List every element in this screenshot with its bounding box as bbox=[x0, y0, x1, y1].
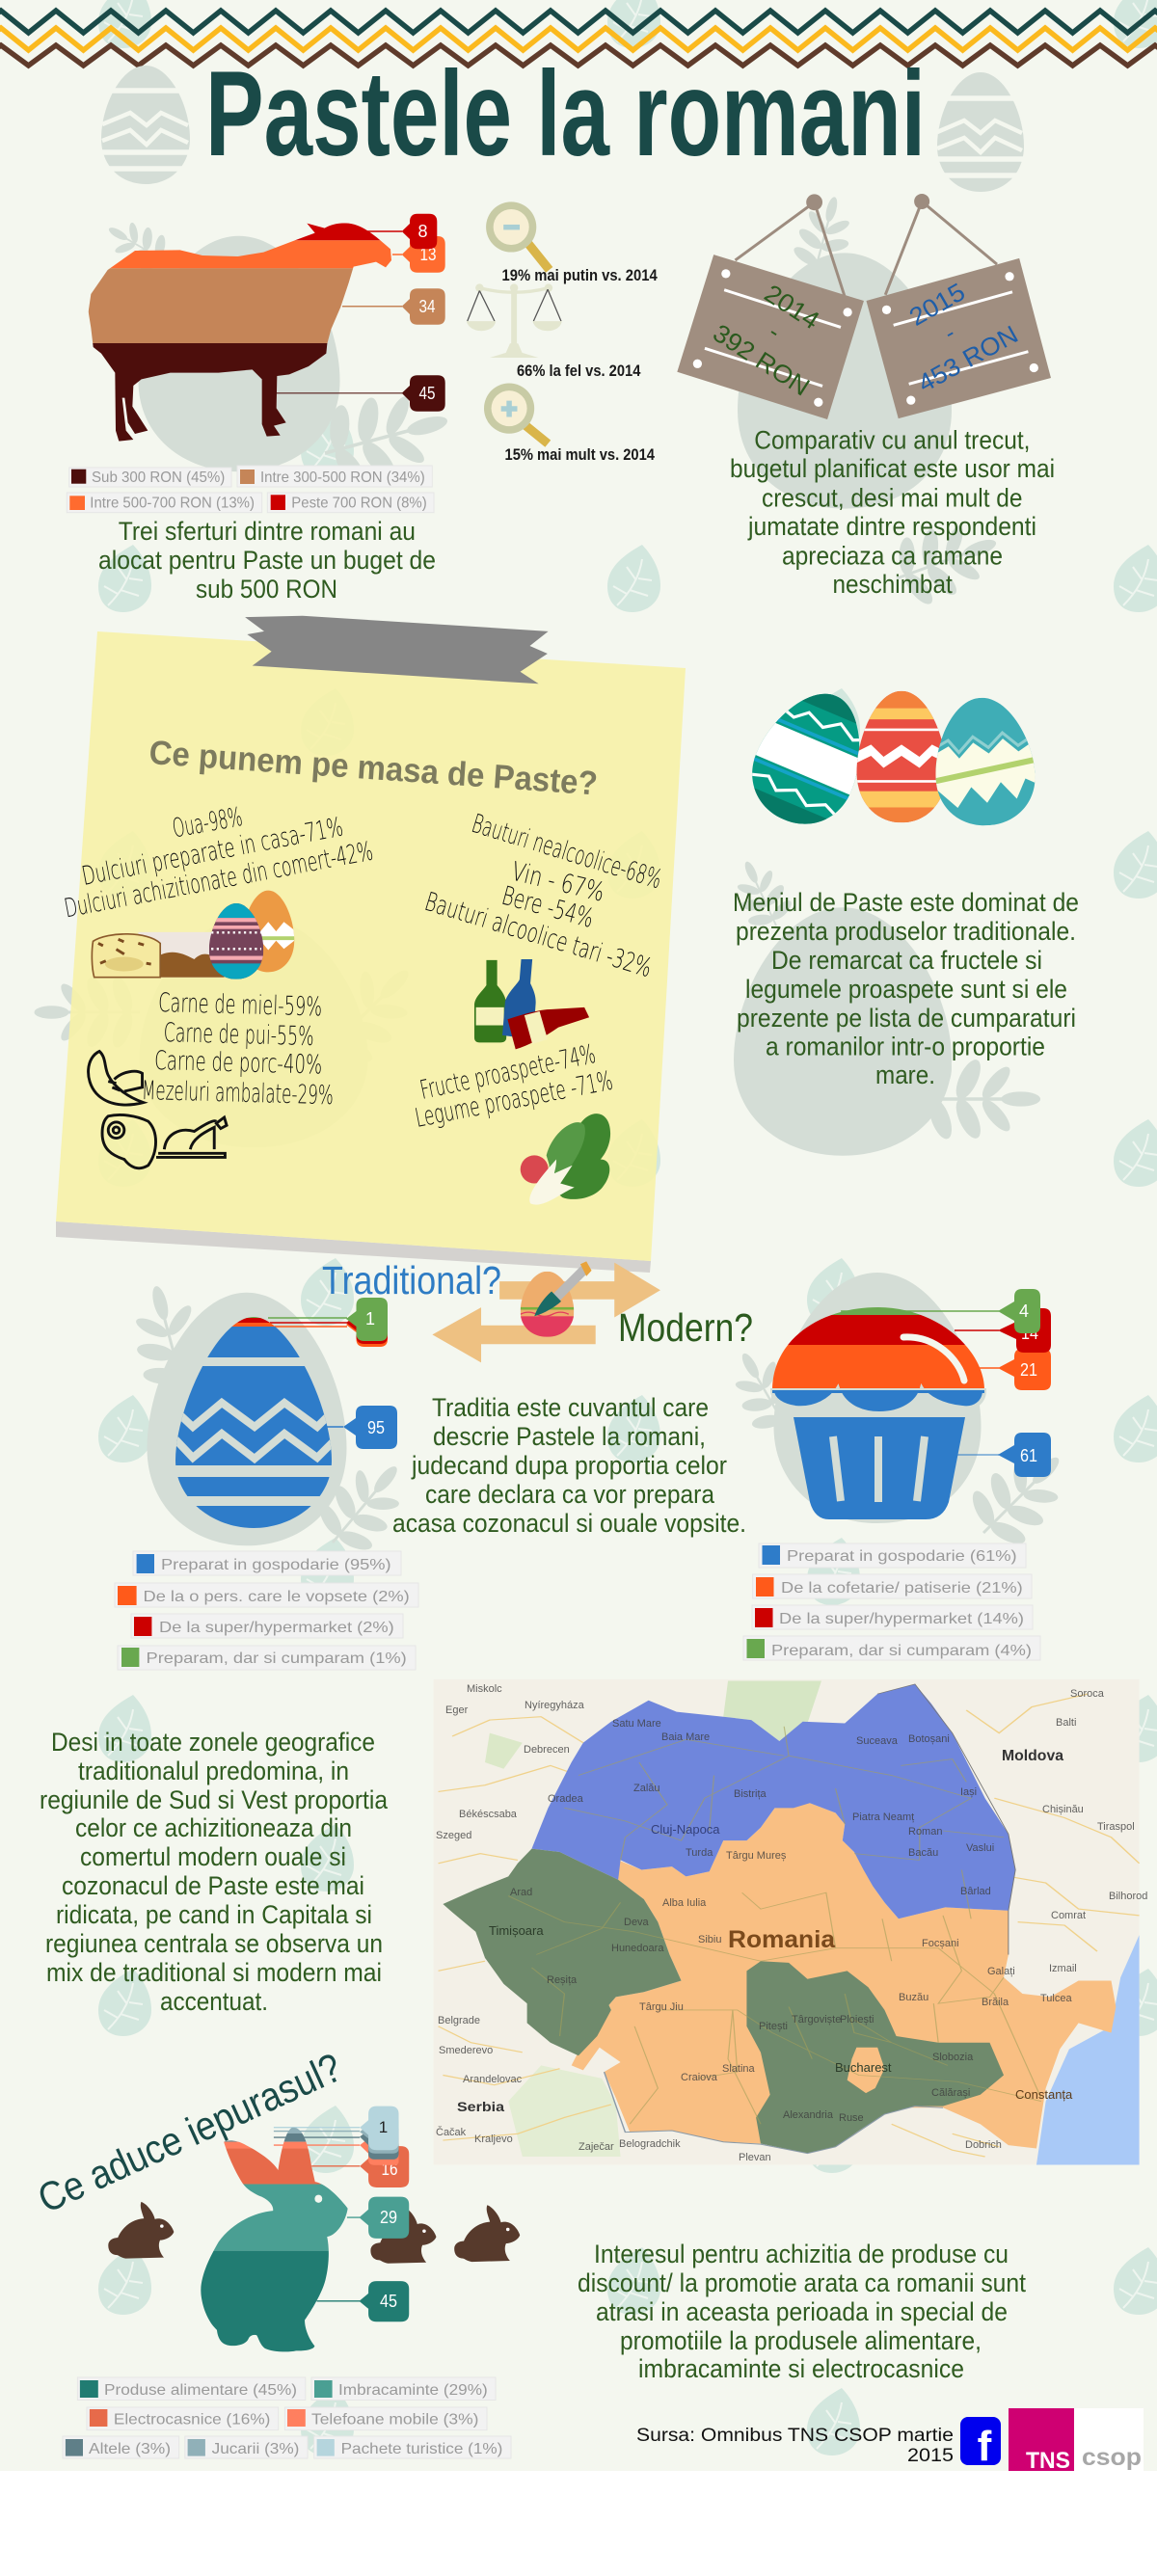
map labels: Cluj-Napoca bbox=[651, 1822, 720, 1837]
drinks list: Vin - 67% bbox=[508, 857, 607, 908]
map labels: Timișoara bbox=[489, 1923, 544, 1938]
map labels: Zalău bbox=[633, 1783, 660, 1794]
text: menu summary: prezenta produselor traditionale. bbox=[736, 917, 1076, 946]
text: discount summary: atrasi in aceasta perioada in special de bbox=[596, 2297, 1008, 2326]
map labels: Deva bbox=[624, 1917, 650, 1928]
meat list: Carne de miel-59% bbox=[158, 988, 323, 1022]
sweets and eggs list: Oua-98% bbox=[171, 802, 245, 844]
text: budget comparison: crescut, desi mai mult de bbox=[762, 483, 1022, 512]
text: regional summary: regiunea centrala se observa un bbox=[45, 1929, 383, 1958]
value 4: 4 bbox=[1019, 1301, 1029, 1321]
callout 16 bbox=[360, 2146, 409, 2187]
map labels: Roman bbox=[908, 1826, 942, 1838]
map labels: Plevan bbox=[739, 2152, 771, 2163]
text: menu summary: mare. bbox=[875, 1060, 935, 1089]
decorative title egg right bbox=[930, 72, 1027, 192]
text: budget summary: alocat pentru Paste un buget de bbox=[98, 546, 436, 575]
leader lines bbox=[363, 230, 402, 232]
map labels: Ploiești bbox=[840, 2014, 874, 2026]
panel: traditional egg chart bbox=[174, 1298, 397, 1529]
traditional legend: De la super/hypermarket (2%) bbox=[159, 1620, 394, 1636]
text: regional summary: mix de traditional si modern mai bbox=[46, 1958, 382, 1987]
value 16: 16 bbox=[382, 2160, 397, 2179]
text: tradition summary: care declara ca vor prepara bbox=[425, 1480, 715, 1509]
callout 21 bbox=[998, 1349, 1051, 1390]
map labels: Bacău bbox=[908, 1847, 938, 1859]
text: discount summary: discount/ la promotie arata ca romanii sunt bbox=[578, 2268, 1026, 2297]
heading: Ce aduce iepurasul: Ce aduce iepurasul? bbox=[31, 2044, 348, 2221]
map labels: Soroca bbox=[1070, 1688, 1105, 1700]
value 45: 45 bbox=[418, 384, 436, 403]
map labels: Belgrade bbox=[438, 2015, 480, 2026]
sign 2015 bbox=[866, 258, 1051, 418]
sheep legend bbox=[67, 466, 434, 513]
callout 61 bbox=[998, 1433, 1051, 1477]
callout stack to 1 bbox=[360, 2106, 399, 2165]
rabbit legend: Altele (3%) bbox=[89, 2441, 171, 2457]
map labels: Comrat bbox=[1051, 1910, 1086, 1921]
text: discount summary bbox=[578, 2240, 1026, 2383]
source note: Sursa: Omnibus TNS CSOP martie bbox=[636, 2426, 954, 2446]
sweets and eggs list: Dulciuri preparate in casa-71% bbox=[79, 812, 345, 892]
leader lines bbox=[274, 2128, 360, 2301]
sweets and eggs list: Dulciuri achizitionate din comert-42% bbox=[62, 837, 375, 924]
map labels: Izmail bbox=[1049, 1963, 1077, 1974]
text: regional summary: regiunile de Sud si Vest proportia bbox=[40, 1785, 389, 1814]
text: menu summary: a romanilor intr-o proportie bbox=[766, 1032, 1045, 1060]
icon: magnifier plus bbox=[484, 384, 545, 441]
tape bbox=[245, 616, 549, 684]
source note bbox=[636, 2426, 954, 2466]
map labels: Iași bbox=[960, 1786, 977, 1798]
value 1: 1 bbox=[379, 2118, 388, 2136]
arrow: to the left bbox=[432, 1307, 596, 1362]
rabbit legend: Electrocasnice (16%) bbox=[114, 2411, 270, 2428]
callout 45 bbox=[359, 2281, 409, 2321]
traditional legend: Preparat in gospodarie (95%) bbox=[161, 1557, 391, 1573]
map labels: Eger bbox=[445, 1704, 469, 1716]
modern legend: Preparam, dar si cumparam (4%) bbox=[771, 1643, 1032, 1659]
roads and borders bbox=[508, 1727, 1041, 2124]
map labels: Tulcea bbox=[1040, 1993, 1072, 2004]
icon: magnifier minus bbox=[486, 201, 547, 266]
map labels: Brăila bbox=[982, 1997, 1009, 2008]
text: menu summary: legumele proaspete sunt si ele bbox=[745, 975, 1067, 1004]
text: tradition summary: judecand dupa proportia celor bbox=[411, 1451, 727, 1480]
value 8: 8 bbox=[417, 222, 428, 241]
map labels: Ruse bbox=[839, 2112, 864, 2124]
muffin cup bbox=[794, 1417, 965, 1519]
text: discount summary: promotiile la produsele alimentare, bbox=[620, 2326, 982, 2355]
leader lines bbox=[268, 1317, 347, 1319]
sign 2015: 453 RON bbox=[913, 319, 1023, 398]
heading: Modern: Modern? bbox=[618, 1305, 753, 1350]
map labels: Turda bbox=[686, 1847, 713, 1859]
map labels: Alba Iulia bbox=[662, 1897, 707, 1909]
map labels: Romania bbox=[728, 1926, 836, 1953]
logo: TNS csop: TNS bbox=[1026, 2448, 1070, 2474]
striped egg bbox=[174, 1317, 337, 1529]
panel: yellow note bbox=[56, 616, 686, 1273]
produce list: Fructe proaspete-74% bbox=[417, 1039, 598, 1106]
map labels bbox=[436, 1683, 1147, 2163]
map labels: Nyíregyháza bbox=[525, 1700, 585, 1711]
text: menu summary: prezente pe lista de cumparaturi bbox=[737, 1004, 1076, 1033]
rabbit legend: Imbracaminte (29%) bbox=[338, 2382, 488, 2399]
meat list bbox=[142, 988, 334, 1111]
map labels: Balti bbox=[1056, 1717, 1076, 1729]
map labels: Reșița bbox=[547, 1974, 578, 1986]
logo: TNS csop bbox=[1009, 2408, 1144, 2474]
map labels: Tiraspol bbox=[1097, 1821, 1135, 1833]
icon: balance scale bbox=[467, 283, 562, 358]
map labels: Bârlad bbox=[960, 1886, 991, 1897]
map labels: Oradea bbox=[548, 1793, 584, 1805]
map labels: Satu Mare bbox=[612, 1718, 661, 1730]
sheep legend: Intre 500-700 RON (13%) bbox=[90, 496, 255, 512]
sheep legend: Peste 700 RON (8%) bbox=[291, 496, 427, 512]
map labels: Târgu Jiu bbox=[639, 2001, 684, 2013]
icon: bottles bbox=[474, 959, 589, 1049]
sign 2015: 2015 bbox=[904, 277, 970, 332]
rabbit legend: Jucarii (3%) bbox=[212, 2441, 299, 2457]
rabbit legend bbox=[63, 2377, 511, 2458]
text: regional summary: traditionalul predomina, in bbox=[78, 1757, 349, 1785]
callout 95 bbox=[343, 1406, 397, 1449]
value 1: 1 bbox=[365, 1309, 375, 1328]
map labels: Zaječar bbox=[578, 2141, 614, 2153]
value 13: 13 bbox=[420, 245, 436, 264]
value 61: 61 bbox=[1020, 1446, 1037, 1465]
meat list: Carne de pui-55% bbox=[163, 1018, 314, 1052]
map labels: Čačak bbox=[436, 2126, 467, 2138]
value 14: 14 bbox=[1021, 1324, 1038, 1343]
text: regional summary: celor ce achizitioneaza din bbox=[75, 1813, 352, 1842]
panel: map of Romania bbox=[434, 1679, 1147, 2164]
map labels: Piatra Neamț bbox=[852, 1811, 914, 1823]
text: less than 2014: 19% mai putin vs. 2014 bbox=[501, 266, 658, 284]
map labels: Slatina bbox=[722, 2063, 756, 2075]
text: discount summary: Interesul pentru achizitia de produse cu bbox=[594, 2240, 1009, 2268]
map labels: Dobrich bbox=[965, 2139, 1002, 2151]
map labels: Chișinău bbox=[1042, 1804, 1084, 1815]
text: regional summary: ridicata, pe cand in Capitala si bbox=[56, 1900, 372, 1929]
rabbit legend: Telefoane mobile (3%) bbox=[311, 2411, 478, 2428]
map labels: Târgoviște bbox=[792, 2014, 841, 2026]
source note: 2015 bbox=[907, 2446, 954, 2466]
panel: hanging signs bbox=[677, 194, 1051, 419]
map labels: Vaslui bbox=[966, 1842, 994, 1854]
icon: sausage and meat bbox=[89, 1051, 227, 1168]
text: regional summary: cozonacul de Paste este mai bbox=[62, 1871, 364, 1900]
callout 13 bbox=[402, 236, 445, 273]
sign 2015: - bbox=[940, 320, 959, 347]
map labels: Pitești bbox=[759, 2021, 788, 2032]
green egg bbox=[752, 694, 860, 824]
callout 4 bbox=[998, 1289, 1040, 1333]
map labels: Târgu Mureș bbox=[726, 1850, 787, 1862]
value 29: 29 bbox=[380, 2208, 397, 2227]
sweets and eggs list bbox=[62, 802, 375, 924]
callout 29 bbox=[359, 2197, 409, 2239]
arrow: to the right bbox=[499, 1263, 660, 1317]
text: tradition summary: acasa cozonacul si ouale vopsite. bbox=[392, 1509, 746, 1538]
logo: TNS csop: csop bbox=[1082, 2444, 1142, 2471]
traditional legend bbox=[115, 1551, 418, 1670]
map labels: Belogradchik bbox=[619, 2138, 681, 2150]
panel: rabbit gift chart bbox=[193, 2106, 409, 2357]
text: regional summary bbox=[40, 1728, 389, 2016]
note heading: Ce punem pe masa de Paste? bbox=[148, 734, 599, 802]
text: regional summary: comertul modern ouale si bbox=[80, 1842, 346, 1871]
sign 2014 bbox=[677, 194, 997, 419]
map labels: Constanța bbox=[1015, 2087, 1073, 2102]
text: same as 2014: 66% la fel vs. 2014 bbox=[517, 362, 641, 380]
text: more than 2014: 15% mai mult vs. 2014 bbox=[505, 445, 655, 464]
map labels: Moldova bbox=[1002, 1748, 1063, 1764]
map labels: Szeged bbox=[436, 1830, 471, 1841]
text: budget summary: Trei sferturi dintre romani au bbox=[119, 517, 416, 546]
map labels: Focșani bbox=[922, 1938, 959, 1949]
icon: facebook: f bbox=[978, 2423, 992, 2470]
muffin dome bbox=[772, 1307, 984, 1388]
text: tradition summary bbox=[392, 1393, 746, 1538]
text: menu summary bbox=[733, 888, 1079, 1089]
text: menu summary: Meniul de Paste este dominat de bbox=[733, 888, 1079, 917]
teal egg bbox=[935, 698, 1036, 825]
map labels: Kraljevo bbox=[474, 2133, 513, 2145]
text: tradition summary: Traditia este cuvantul care bbox=[432, 1393, 709, 1422]
icon: three easter eggs bbox=[752, 690, 1036, 825]
muffin scalloped top bbox=[772, 1388, 984, 1413]
text: budget comparison: apreciaza ca ramane bbox=[782, 542, 1003, 571]
text: budget comparison: neschimbat bbox=[833, 570, 953, 599]
map labels: Bistrița bbox=[734, 1788, 767, 1800]
value 34: 34 bbox=[418, 297, 436, 316]
traditional legend: Preparam, dar si cumparam (1%) bbox=[147, 1650, 407, 1667]
decorative title egg left bbox=[96, 66, 193, 184]
value 45: 45 bbox=[380, 2292, 397, 2311]
rabbit body bbox=[201, 2127, 348, 2352]
rabbit legend: Pachete turistice (1%) bbox=[341, 2441, 502, 2457]
muffin highlight bbox=[903, 1337, 964, 1381]
map labels: Slobozia bbox=[932, 2052, 974, 2063]
text: budget comparison: Comparativ cu anul trecut, bbox=[754, 426, 1030, 455]
map labels: Debrecen bbox=[524, 1744, 570, 1756]
map labels: Smederevo bbox=[439, 2045, 493, 2056]
drinks list: Bere -54% bbox=[498, 881, 597, 934]
text: budget comparison: jumatate dintre respondenti bbox=[747, 512, 1036, 541]
modern legend: De la super/hypermarket (14%) bbox=[779, 1611, 1024, 1627]
callout 14 bbox=[998, 1308, 1051, 1353]
callout 34 bbox=[402, 288, 445, 325]
rabbit legend: Produse alimentare (45%) bbox=[104, 2382, 297, 2399]
sign 2014: - bbox=[764, 319, 785, 345]
text: regional summary: accentuat. bbox=[160, 1987, 268, 2016]
text: menu summary: De remarcat ca fructele si bbox=[771, 946, 1042, 975]
text: budget comparison bbox=[730, 426, 1055, 599]
callout 45 bbox=[402, 375, 445, 412]
sign 2014: 392 RON bbox=[708, 318, 815, 402]
drinks list: Bauturi nealcoolice-68% bbox=[469, 809, 665, 895]
map labels: Craiova bbox=[681, 2072, 718, 2083]
panel: modern muffin chart bbox=[767, 1289, 1051, 1519]
heading: Traditional: Traditional? bbox=[322, 1258, 501, 1302]
modern legend: De la cofetarie/ patiserie (21%) bbox=[781, 1580, 1023, 1597]
map labels: Sibiu bbox=[698, 1934, 721, 1945]
sheep legend: Sub 300 RON (45%) bbox=[92, 470, 225, 486]
icon: vegetables bbox=[521, 1114, 610, 1205]
meat list: Carne de porc-40% bbox=[154, 1046, 323, 1081]
leader lines bbox=[841, 1310, 999, 1312]
sheep legend: Intre 300-500 RON (34%) bbox=[260, 470, 425, 486]
value 21: 21 bbox=[1020, 1360, 1037, 1380]
drinks list: Bauturi alcoolice tari -32% bbox=[421, 887, 656, 983]
meat list: Mezeluri ambalate-29% bbox=[142, 1076, 334, 1111]
produce list: Legume proaspete -71% bbox=[413, 1066, 615, 1134]
map labels: Arandelovac bbox=[463, 2074, 523, 2085]
map labels: Suceava bbox=[856, 1735, 899, 1747]
traditional legend: De la o pers. care le vopsete (2%) bbox=[143, 1589, 410, 1605]
icon: small brown rabbits bbox=[108, 2202, 520, 2264]
sheep silhouette bbox=[89, 223, 391, 442]
orange egg bbox=[856, 691, 947, 822]
text: tradition summary: descrie Pastele la romani, bbox=[433, 1422, 706, 1451]
text: discount summary: imbracaminte si electrocasnice bbox=[638, 2354, 964, 2383]
modern legend bbox=[743, 1543, 1040, 1660]
callout 8 bbox=[402, 214, 437, 249]
drinks list bbox=[421, 809, 665, 983]
produce list bbox=[413, 1039, 615, 1134]
map labels: Bilhorod bbox=[1109, 1891, 1147, 1902]
map labels: Baia Mare bbox=[661, 1731, 710, 1743]
text: budget summary bbox=[98, 517, 436, 604]
map labels: Arad bbox=[510, 1887, 532, 1898]
muffin cup stripes bbox=[833, 1436, 925, 1502]
text: budget summary: sub 500 RON bbox=[196, 575, 337, 604]
map labels: Botoșani bbox=[908, 1733, 950, 1745]
map labels: Hunedoara bbox=[611, 1943, 664, 1954]
modern legend: Preparat in gospodarie (61%) bbox=[787, 1548, 1017, 1565]
map labels: Bucharest bbox=[835, 2060, 892, 2075]
map regions bbox=[434, 1679, 1140, 2164]
icon: facebook bbox=[960, 2417, 1001, 2470]
map labels: Miskolc bbox=[467, 1683, 502, 1695]
panel: budget sheep chart bbox=[84, 214, 445, 446]
map labels: Békéscsaba bbox=[459, 1809, 518, 1820]
sign 2014: 2014 bbox=[760, 279, 824, 335]
icon: egg being painted bbox=[521, 1261, 592, 1339]
background egg and branch motifs bbox=[35, 190, 1085, 1565]
map labels: Galați bbox=[987, 1966, 1015, 1977]
value 95: 95 bbox=[367, 1418, 385, 1437]
zigzag header border bbox=[0, 0, 1157, 69]
text: budget comparison: bugetul planificat este usor mai bbox=[730, 454, 1055, 483]
map labels: Alexandria bbox=[783, 2109, 834, 2121]
callout 1 stack bbox=[346, 1303, 388, 1347]
map labels: Buzău bbox=[899, 1992, 928, 2003]
map labels: Călărași bbox=[931, 2087, 970, 2099]
icon: cozonac and eggs bbox=[92, 891, 294, 979]
map labels: Serbia bbox=[457, 2099, 504, 2114]
text: regional summary: Desi in toate zonele geografice bbox=[51, 1728, 375, 1757]
